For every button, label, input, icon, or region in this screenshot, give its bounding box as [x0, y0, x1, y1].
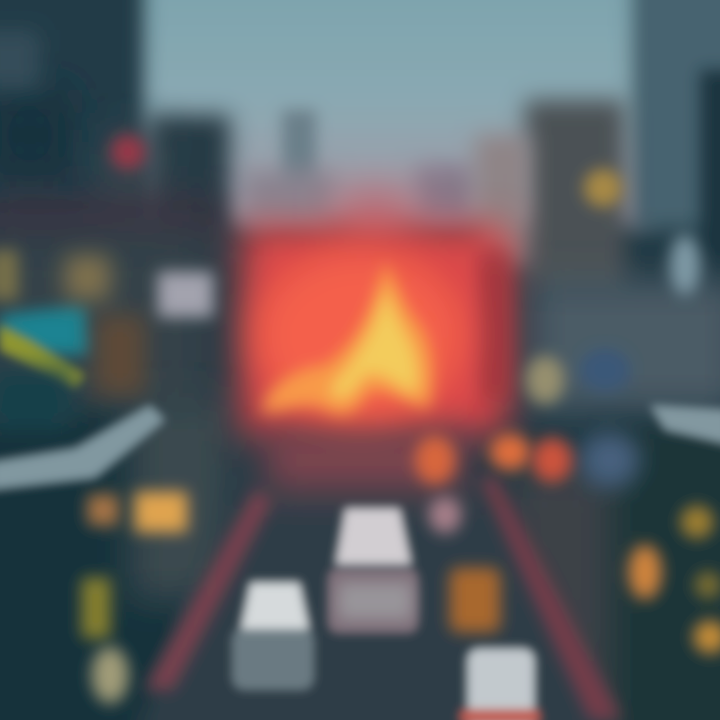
left street lights	[82, 492, 187, 703]
buildings: right side	[475, 0, 720, 720]
left overpass	[0, 405, 165, 490]
vehicle: orange car	[450, 568, 500, 632]
vehicle: lower right car	[460, 648, 540, 720]
flame	[262, 262, 433, 414]
red glow	[240, 185, 508, 490]
buildings: left side	[0, 0, 230, 720]
road	[130, 480, 620, 720]
left awning: teal and yellow sign	[0, 305, 145, 430]
vehicle: centre van	[328, 508, 418, 633]
buildings: centre distance	[245, 110, 475, 230]
centre street glows	[415, 434, 572, 533]
sky	[135, 0, 645, 225]
road rails	[145, 475, 622, 720]
left window lights	[0, 135, 213, 317]
vehicle: left car	[232, 582, 314, 690]
right lights	[526, 169, 720, 653]
right overpass	[650, 405, 720, 445]
